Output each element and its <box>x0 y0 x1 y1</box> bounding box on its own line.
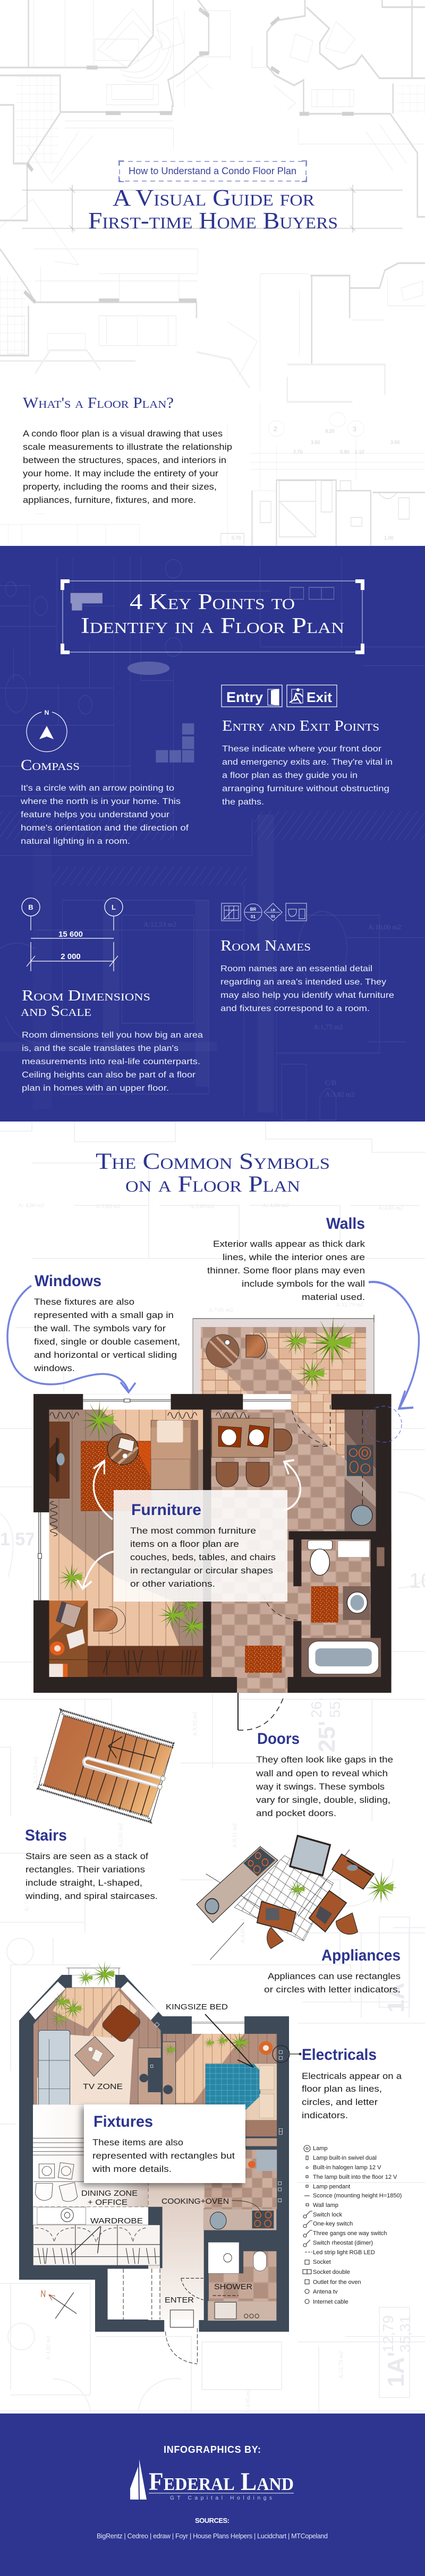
electrical legend: Internet cable <box>313 2299 348 2305</box>
curtains <box>50 1413 249 1536</box>
sofa <box>151 1420 198 1490</box>
electrical legend <box>303 2145 402 2305</box>
heading: room dimensions and scale: Room Dimensions <box>22 988 150 1004</box>
electrical legend: Antena tv <box>313 2289 338 2295</box>
kitchen counter <box>345 1410 376 1531</box>
window openings <box>33 1394 291 1601</box>
faint area labels: 35,31 <box>397 2315 413 2352</box>
text block: windows: windows. <box>33 1364 75 1373</box>
text block: entry and exit <box>222 744 393 807</box>
heading: appliances: Appliances <box>321 1947 401 1964</box>
faint dimension labels: 0.70 <box>232 535 241 541</box>
text block: definition: property, including the rooms and their sizes, <box>23 482 217 492</box>
text block: compass: It's a circle with an arrow pointing to <box>21 784 174 793</box>
icon: exit sign <box>287 685 337 707</box>
text block: definition: between the structures, spaces, and interiors in <box>23 456 226 465</box>
text block: entry and exit: These indicate where your front door <box>222 744 381 754</box>
kitchen counter <box>203 2201 276 2230</box>
text block: room names: may also help you identify what furniture <box>220 991 394 1000</box>
icon: room name tags: LR <box>271 909 276 912</box>
bed <box>206 2064 277 2120</box>
dining chairs <box>216 1429 292 1487</box>
kitchen tiles <box>148 2120 277 2209</box>
illustration: appliances <box>197 1836 398 1960</box>
text block: stairs: include straight, L-shaped, <box>26 1878 142 1888</box>
living room floor <box>49 1410 203 1677</box>
text block: compass: where the north is in your home. This <box>20 797 181 806</box>
title: on a Floor Plan <box>125 1172 300 1197</box>
text block: doors: vary for single, double, sliding, <box>256 1795 390 1805</box>
faint area labels: A:9,92 m2 <box>192 1711 198 1736</box>
faint area labels: A:10,00 m2 <box>368 923 401 931</box>
faint area labels: A:12,79 m2 <box>336 1302 364 1308</box>
bedroom floor <box>163 2034 277 2120</box>
text block: appliances: Appliances can use rectangles <box>268 1972 401 1981</box>
text block: doors: and pocket doors. <box>256 1809 336 1818</box>
faint dimension labels: 2.70 <box>293 449 303 455</box>
faint area labels: A: 4,60 m2 <box>262 1202 289 1209</box>
kitchen floor <box>211 1394 371 1693</box>
sofa <box>38 2030 70 2119</box>
text block: room dimensions: is, and the scale translates the plan's <box>22 1044 178 1053</box>
text block: doors: way it swings. These symbols <box>256 1782 385 1792</box>
text block: stairs <box>25 1852 158 1901</box>
tv console <box>49 1422 70 1499</box>
text block: doors <box>256 1755 393 1818</box>
faint area labels: 1 57 <box>0 1529 35 1550</box>
icon: entry sign: Entry <box>226 689 263 705</box>
bathroom door swing <box>264 1596 297 1620</box>
logo: federal land: Federal Land <box>149 2468 294 2496</box>
illustration: floor plan 1 <box>33 1394 392 1693</box>
faint area labels: A:3,83 m2 <box>96 1203 121 1210</box>
door rug <box>245 1646 282 1673</box>
wardrobe <box>88 1646 203 1677</box>
faint area labels: A: 4,60 m2 <box>18 1202 45 1209</box>
coffee table <box>75 2036 114 2076</box>
text block: walls <box>207 1239 366 1302</box>
logo: federal land: GT Capital Holdings <box>170 2495 272 2501</box>
subtitle box <box>119 161 307 182</box>
electrical legend: Lamp pendant <box>313 2184 350 2190</box>
title frame: 4 Key Points to <box>130 590 295 614</box>
faint area labels <box>143 920 401 1098</box>
bathroom <box>181 2243 276 2321</box>
faint dimension labels: 3.50 <box>390 440 400 445</box>
text block: compass: feature helps you understand your <box>21 810 169 819</box>
panel: fixtures callout <box>84 2104 245 2183</box>
night lamps <box>259 2041 274 2135</box>
hallway floor <box>148 2169 204 2320</box>
plants <box>57 1316 359 1641</box>
text block: electricals: Electricals appear on a <box>302 2072 402 2081</box>
handwritten room labels: COOKING+OVEN <box>162 2197 229 2206</box>
icon: dimension diagram: L <box>112 903 116 911</box>
faint dimension labels <box>232 425 400 541</box>
text block: definition: A condo floor plan is a visual drawing that uses <box>23 429 223 439</box>
title frame <box>61 579 364 654</box>
dining table <box>211 1418 274 1457</box>
faint area labels: A:4,05 m2 <box>240 1919 246 1944</box>
panel: furniture callout: The most common furniture <box>130 1526 256 1536</box>
handwritten room labels: TV ZONE <box>83 2082 123 2091</box>
wardrobe area <box>33 2182 163 2268</box>
arrow: windows <box>7 1286 135 1392</box>
icon: room name tags <box>222 903 307 921</box>
entrance door <box>164 2310 199 2364</box>
heading: what's a floor plan: What's a Floor Plan? <box>23 395 174 412</box>
heading: windows: Windows <box>35 1272 101 1290</box>
panel: furniture callout: Furniture <box>131 1501 201 1519</box>
faint area labels: A:3,82 m2 <box>325 1090 355 1098</box>
text block: windows: These fixtures are also <box>34 1297 134 1307</box>
text block: windows: fixed, single or double casement, <box>34 1337 180 1347</box>
illustration: stairs <box>38 1710 174 1822</box>
text block: definition: your home. It may include the entirety of your <box>23 469 219 478</box>
panel: fixtures callout: with more details. <box>92 2164 172 2174</box>
text block: room names <box>220 964 394 1013</box>
illustration: balcony <box>193 1315 374 1396</box>
faint area labels: A:7,05 m2 <box>208 1307 233 1313</box>
faint area labels: 1A' <box>383 2351 409 2387</box>
heading: compass: Compass <box>21 757 80 774</box>
electrical legend: Socket double <box>313 2269 350 2275</box>
closet <box>108 2269 160 2320</box>
text block: windows: represented with a small gap in <box>34 1311 174 1320</box>
faint area labels: A:4,05 m2 <box>245 2389 251 2414</box>
outer walls <box>33 1394 392 1693</box>
callout marker: electrical <box>273 2046 301 2062</box>
handwritten room labels: SHOWER <box>214 2282 252 2291</box>
panel: furniture callout <box>114 1490 287 1602</box>
socket marker icons <box>150 2022 282 2202</box>
text block: walls: lines, while the interior ones are <box>223 1253 365 1262</box>
faint area labels: C/B <box>325 1079 336 1086</box>
heading: room dimensions and scale <box>21 988 150 1020</box>
desk and storage <box>49 1601 88 1677</box>
handwritten room labels: WARDROBE <box>90 2216 143 2226</box>
credit heading: INFOGRAPHICS BY: <box>164 2444 261 2455</box>
faint area labels: A:12,53 m2 <box>143 920 176 928</box>
faint area labels: A:2,01 m2 <box>117 1823 124 1848</box>
heading: room names: Room Names <box>220 938 311 954</box>
faint area labels: A:4,05 m2 <box>378 1205 403 1211</box>
tv partition <box>138 2034 176 2104</box>
door swing <box>238 1693 284 1730</box>
panel: fixtures callout: These items are also <box>92 2138 183 2147</box>
text block: compass: home's orientation and the direction of <box>21 824 189 833</box>
panel: header <box>0 0 425 546</box>
text block: electricals: indicators. <box>302 2111 348 2120</box>
text block: room dimensions: Ceiling heights can also be part of a floor <box>22 1071 196 1080</box>
faint dimension labels: 3.50 <box>311 440 320 445</box>
title <box>96 1149 330 1197</box>
text block: electricals: circles, and letter <box>302 2098 378 2107</box>
panel: 4 key points <box>0 546 425 1122</box>
panel: furniture callout: couches, beds, tables, and chairs <box>130 1553 276 1562</box>
text block: walls: Exterior walls appear as thick dark <box>213 1239 366 1249</box>
handwritten room labels: + OFFICE <box>88 2198 128 2207</box>
icon: compass: N <box>45 709 49 716</box>
white dining area <box>33 2104 148 2207</box>
panel: fixtures callout: represented with rectangles but <box>92 2151 235 2161</box>
title <box>22 185 403 234</box>
electrical legend: Built-in halogen lamp 12 V <box>313 2164 381 2171</box>
handwritten room labels: ENTER <box>165 2296 194 2305</box>
subtitle box: How to Understand a Condo Floor Plan <box>129 166 296 176</box>
text block: windows: and horizontal or vertical sliding <box>34 1350 177 1360</box>
blueprint background <box>0 0 425 546</box>
faint dimension labels: 3 <box>353 425 356 433</box>
electrical legend: Outlet for the oven <box>313 2279 361 2286</box>
electrical legend: Switch lock <box>313 2212 343 2218</box>
faint area labels: 1A <box>383 1983 409 2013</box>
electrical legend: Socket <box>313 2259 331 2265</box>
text block: walls: thinner. Some floor plans may even <box>207 1266 365 1276</box>
icon: room name tags: BR <box>250 907 256 912</box>
text block: entry and exit: and emergency exits are. They're vital in <box>222 758 393 767</box>
icon: dimension diagram: 15 600 <box>58 930 83 939</box>
text block: compass <box>20 784 189 846</box>
faint area labels: 26, <box>308 1697 325 1718</box>
text block: appliances: or circles with letter indicators. <box>264 1985 401 1995</box>
plants <box>49 1961 251 2057</box>
text block: definition: scale measurements to illustrate the relationship <box>23 442 232 452</box>
text block: windows <box>33 1297 180 1373</box>
text block: room names: and fixtures correspond to a room. <box>220 1004 370 1013</box>
text block: entry and exit: a floor plan as they guide you in <box>222 771 358 780</box>
heading: electricals: Electricals <box>302 2046 377 2064</box>
panel: common symbols <box>0 1122 425 2414</box>
faint area labels: A:12,25 m2 <box>32 1756 39 1784</box>
rug <box>37 2035 133 2104</box>
panel: furniture callout: or other variations. <box>130 1579 215 1589</box>
heading: walls: Walls <box>326 1215 365 1233</box>
electrical legend: Lamp built-in swivel dual <box>313 2155 377 2161</box>
electrical legend: One-key switch <box>313 2221 353 2227</box>
faint area labels <box>0 1202 425 2414</box>
living room floor <box>33 1988 163 2104</box>
icon: compass <box>27 709 67 752</box>
icon: dimension diagram <box>22 898 123 971</box>
bathroom fixtures <box>301 1541 385 1677</box>
faint area labels: A: 7,05 m2 <box>23 1885 30 1912</box>
icon: exit sign: Exit <box>307 689 332 705</box>
title frame: Identify in a Floor Plan <box>81 614 344 638</box>
text block: doors: They often look like gaps in the <box>256 1755 393 1765</box>
text block: room names: regarding an area's intended use. They <box>220 978 386 987</box>
faint area labels: A:3,83 m2 <box>190 1203 215 1210</box>
text block: entry and exit: the paths. <box>222 798 264 807</box>
text block: stairs: Stairs are seen as a stack of <box>26 1852 148 1861</box>
title: The Common Symbols <box>96 1149 330 1174</box>
sources list: BigRentz | Cedreo | edraw | Foyr | House Plans Helpers | Lucidchart | MTCopeland <box>97 2532 328 2540</box>
text block: definition: appliances, furniture, fixtures, and more. <box>23 495 196 505</box>
text block: windows: the wall. The symbols vary for <box>34 1324 166 1333</box>
blueprint background <box>0 1122 425 2414</box>
decorative floor plan fragment <box>71 587 334 763</box>
north arrow <box>41 2290 76 2318</box>
electrical legend: Switch rheostat (dimer) <box>313 2240 373 2246</box>
faint area labels: A:3,82 m2 <box>45 2335 52 2360</box>
chair <box>94 1606 125 1633</box>
faint dimension labels: 2 <box>274 425 277 433</box>
faint area labels: A:1,75 m2 <box>313 1023 343 1031</box>
text block: room dimensions: Room dimensions tell you how big an area <box>22 1031 203 1040</box>
text block: doors: wall and open to reveal which <box>256 1769 388 1778</box>
electrical legend: Led strip light RGB LED <box>313 2249 375 2256</box>
text block: room dimensions <box>22 1031 203 1093</box>
faint dimension labels: 1.10 <box>355 449 364 455</box>
faint area labels: A:9,11 m2 <box>232 1823 238 1848</box>
heading: room dimensions and scale: and Scale <box>21 1003 91 1020</box>
handwritten room labels: KINGSIZE BED <box>166 2002 228 2012</box>
faint dimension labels: 0.90 <box>340 449 350 455</box>
callout circle: wall <box>366 1406 402 1442</box>
electrical legend: Three gangs one way switch <box>313 2230 387 2237</box>
outer walls <box>19 1975 289 2332</box>
heading: doors: Doors <box>257 1730 300 1748</box>
panel: furniture callout: in rectangular or circular shapes <box>130 1566 273 1576</box>
electrical legend: Wall lamp <box>313 2202 338 2209</box>
faint area labels: 55, <box>327 1697 343 1718</box>
handwritten room labels <box>81 2002 252 2305</box>
text block: definition <box>23 429 232 505</box>
text block: room dimensions: plan in homes with an upper floor. <box>22 1084 169 1093</box>
text block: stairs: winding, and spiral staircases. <box>25 1892 158 1901</box>
sources heading: SOURCES: <box>195 2517 230 2524</box>
text block: room names: Room names are an essential detail <box>220 964 372 973</box>
faint area labels: 25' <box>314 1721 340 1752</box>
heading: stairs: Stairs <box>25 1827 67 1844</box>
logo: federal land <box>130 2459 294 2501</box>
faint area labels: A:12,79 m2 <box>338 2351 344 2379</box>
text block: appliances <box>264 1972 401 1995</box>
arrows: furniture <box>77 1282 419 1589</box>
rug <box>81 1441 151 1511</box>
text block: electricals: floor plan as lines, <box>302 2084 382 2094</box>
title: First-time Home Buyers <box>88 208 338 234</box>
label pointer: kingsize bed <box>205 2014 253 2067</box>
icon: room name tags: 01 <box>271 915 275 919</box>
icon: entry sign <box>222 685 282 707</box>
faint dimension labels: 9.20 <box>325 429 335 434</box>
electrical legend: Lamp <box>313 2145 328 2152</box>
text block: electricals <box>302 2072 402 2120</box>
electrical legend: The lamp built into the floor 12 V <box>313 2174 397 2180</box>
handwritten room labels: DINING ZONE <box>81 2189 138 2198</box>
panel: furniture callout: items on a floor plan are <box>130 1539 239 1549</box>
text block: compass: natural lighting in a room. <box>21 837 130 846</box>
faint dimension labels: 1.00 <box>384 535 394 541</box>
blueprint background <box>0 558 425 1120</box>
window <box>192 2016 244 2034</box>
illustration: floor plan 2 <box>19 1961 289 2364</box>
icon: dimension diagram: 2 000 <box>61 952 81 961</box>
text block: entry and exit: arranging furniture without obstructing <box>222 784 389 793</box>
text block: stairs: rectangles. Their variations <box>26 1865 145 1875</box>
panel: fixtures callout: Fixtures <box>94 2113 153 2130</box>
armchair <box>100 2003 142 2044</box>
title: A Visual Guide for <box>113 185 314 211</box>
heading: entry and exit points: Entry and Exit Points <box>222 718 379 734</box>
text block: room dimensions: measurements into real-life counterparts. <box>22 1057 200 1066</box>
text block: walls: include symbols for the wall <box>242 1279 365 1289</box>
round table <box>107 1434 138 1465</box>
icon: room name tags: 01 <box>251 914 256 919</box>
text block: walls: material used. <box>302 1293 365 1302</box>
panel: footer <box>0 2414 425 2576</box>
faint area labels: 12,79 <box>380 2315 396 2352</box>
bay windows <box>29 1968 158 2021</box>
electrical legend: Sconce (mounting height H=1850) <box>313 2193 402 2199</box>
inner walls <box>203 1410 392 1677</box>
icon: dimension diagram: B <box>28 903 33 911</box>
